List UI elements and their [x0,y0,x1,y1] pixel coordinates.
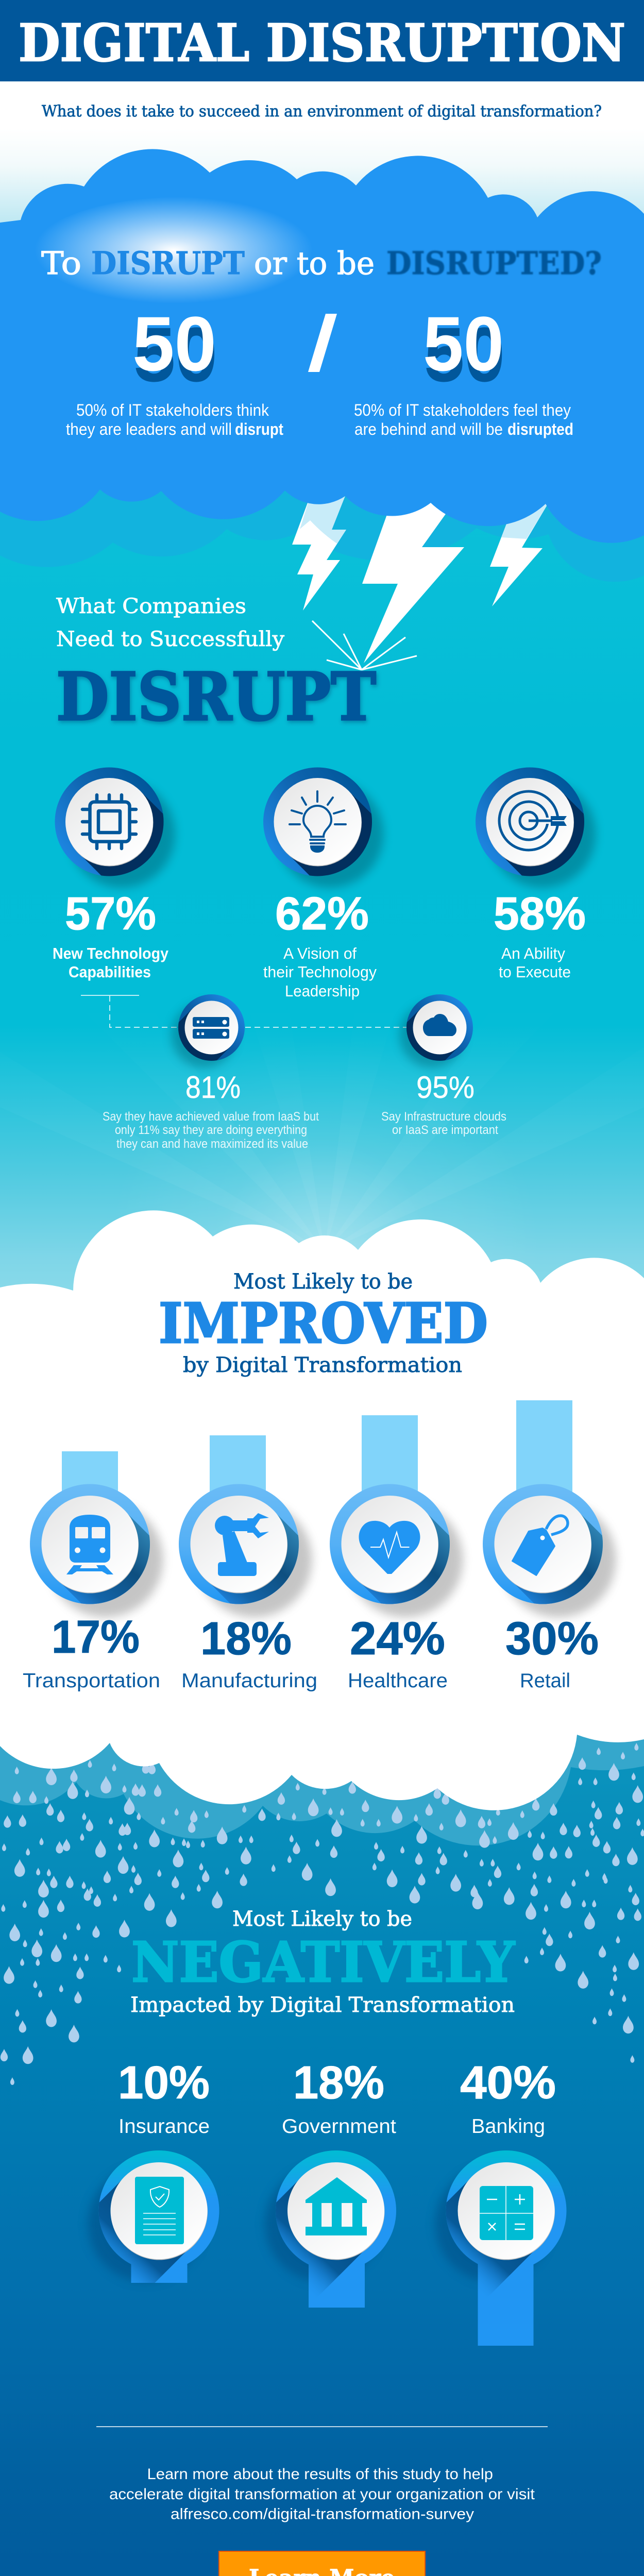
heading: to disrupt or to be disrupted: or to be [254,245,375,282]
badge: healthcare [330,1484,468,1622]
rain drops [1,1743,644,2085]
stat: 30 percent retail: Retail [520,1670,570,1692]
badge: banking [433,2150,567,2346]
subtitle: What does it take to succeed in an environment of digital transformation? [42,103,602,121]
panel: blue storm cloud [0,149,644,543]
heading: most likely to be negatively: NEGATIVELY [131,1930,516,1995]
icon: chip [82,795,136,849]
label: vision: Leadership [285,982,360,1000]
stat: 17 percent transportation [23,1612,160,1692]
heading: most likely to be negatively: Impacted by Digital Transformation [130,1993,515,2017]
text: right stat description [354,401,573,438]
button: learn more [96,2551,548,2576]
text: left stat description: disrupt [235,420,283,438]
stat: 30 percent retail: 30% [505,1613,599,1665]
badge: retail [483,1484,620,1622]
cloud layer behind lightning [0,464,644,582]
bar: retail [516,1400,572,1514]
stat: right 50: 50 [424,311,505,398]
label: new technology capabilities: Capabilities [69,963,151,981]
heading: to disrupt or to be disrupted [41,245,602,282]
label: vision: their Technology [263,963,377,981]
text: call to action [109,2466,535,2522]
background: teal section [0,495,644,1298]
stat: 17 percent transportation: 17% [52,1612,140,1663]
stat: left 50: 50 [133,311,217,398]
lightning sparks [312,621,417,670]
stat: 40 percent banking [460,2057,556,2138]
icon: target [499,791,567,850]
panel: white cloud [0,1210,644,1810]
stat: 18 percent government: 18% [293,2057,384,2109]
heading: most likely to be improved [159,1270,488,1377]
stat: 24 percent healthcare: Healthcare [348,1670,448,1692]
stat: 81 percent: 81% [185,1070,241,1105]
text: 81 percent description: only 11% say they are doing everything [115,1123,307,1137]
header band [0,0,644,81]
heading: to disrupt or to be disrupted: To [41,245,81,282]
badge: new technology capabilities [55,768,179,892]
label: new technology capabilities: New Technology [53,944,169,962]
text: 81 percent description [103,1110,319,1151]
text: call to action: accelerate digital transformation at your organization or visit [109,2486,535,2503]
stat: 40 percent banking: Banking [471,2115,545,2138]
label: ability to execute: to Execute [499,963,571,981]
stat: 18 percent government: Government [282,2115,396,2138]
icon: robot arm [215,1513,269,1576]
text: right stat description: disrupted [507,420,573,438]
badge: server [166,994,245,1072]
background: sun rays [0,1005,644,1298]
stat: 81 percent [103,1070,319,1151]
stat: 30 percent retail [505,1613,599,1692]
heading: most likely to be improved: Most Likely to be [233,1270,413,1294]
label: vision: A Vision of [283,944,357,962]
heading: most likely to be improved: IMPROVED [159,1292,488,1356]
rain cloud lower layer [0,1721,644,1845]
stat: 18 percent manufacturing: 18% [200,1613,292,1665]
label: vision [263,944,377,1000]
page background: sky [0,129,644,500]
heading: most likely to be negatively [130,1907,516,2017]
background: rain section [0,1721,644,2576]
icon: server [193,1017,229,1039]
stat: 95 percent: 95% [416,1070,474,1105]
slash divider [308,314,337,372]
stat: 24 percent healthcare: 24% [350,1613,445,1665]
text: call to action: Learn more about the results of this study to help [147,2466,493,2483]
stat: 24 percent healthcare [348,1613,448,1692]
heading: disrupt: DISRUPT [56,658,376,735]
badge: cloud [395,994,473,1072]
stat: 57 percent: 57% [65,888,156,940]
icon: heart with pulse [359,1521,420,1574]
stat: 18 percent manufacturing [181,1613,317,1692]
stat: 18 percent manufacturing: Manufacturing [181,1670,317,1692]
icon: right lightning bolt [490,495,553,606]
stat: 40 percent banking: 40% [460,2057,556,2109]
heading: to disrupt or to be disrupted: DISRUPT [91,245,245,282]
text: right stat description: are behind and will be [354,420,503,438]
stat: 58 percent [494,888,586,981]
stat: 10 percent insurance: 10% [118,2057,210,2109]
icon: centre lightning bolt [362,495,464,663]
stat: 17 percent transportation: Transportation [23,1670,160,1692]
label: ability to execute [499,944,571,981]
icon: calculator [480,2186,533,2240]
badge: transportation [30,1484,168,1622]
label: ability to execute: An Ability [501,944,565,962]
text: 95 percent description: or IaaS are important [392,1123,498,1137]
icon: train [66,1515,113,1574]
badge: insurance [86,2150,219,2283]
badge: manufacturing [179,1484,316,1622]
icon: cloud [423,1014,456,1036]
text: 81 percent description: Say they have achieved value from IaaS but [103,1110,319,1124]
label: new technology capabilities [53,944,169,981]
lightning bolts [292,489,553,670]
cloud glow [28,197,337,315]
stat: 62 percent: 62% [275,888,369,940]
icon: left lightning bolt [292,489,348,611]
badge: government [263,2150,396,2308]
bar: manufacturing [210,1435,266,1513]
icon: bank building [306,2177,367,2235]
text: call to action: alfresco.com/digital-transformation-survey [171,2506,474,2522]
badge: vision [263,768,388,892]
text: 95 percent description [381,1110,506,1137]
stat: left 50: 50 [132,300,216,387]
stat: 62 percent [263,888,377,1000]
icon: light bulb [290,791,346,852]
heading: what companies need to successfully: Need to Successfully [56,628,284,651]
text: left stat description [66,401,283,438]
stat: 10 percent insurance: Insurance [118,2115,210,2138]
text: 95 percent description: Say Infrastructure clouds [381,1110,506,1124]
icon: price tag [512,1516,568,1575]
stat: right 50: 50 [423,300,504,387]
heading: what companies need to successfully: What Companies [56,595,246,618]
stat: 10 percent insurance [118,2057,210,2138]
stat: 58 percent: 58% [494,888,586,940]
bar: healthcare [362,1415,418,1513]
heading: to disrupt or to be disrupted: DISRUPTED? [386,245,602,282]
text: 81 percent description: they can and have maximized its value [116,1137,308,1151]
text: right stat description: 50% of IT stakeholders feel they [354,401,571,419]
heading: most likely to be improved: by Digital Transformation [183,1353,462,1377]
heading: what companies need to successfully [56,595,284,651]
badge: ability to execute [476,768,600,892]
text: left stat description: they are leaders and will [66,420,232,438]
stat: 18 percent government [282,2057,396,2138]
stat: 95 percent [381,1070,506,1137]
icon: insurance document [135,2177,184,2244]
bar: transportation [62,1451,118,1513]
heading: most likely to be negatively: Most Likely to be [232,1907,412,1931]
connector lines [81,995,412,1027]
text: left stat description: 50% of IT stakeholders think [76,401,269,419]
stat: 57 percent [53,888,169,981]
